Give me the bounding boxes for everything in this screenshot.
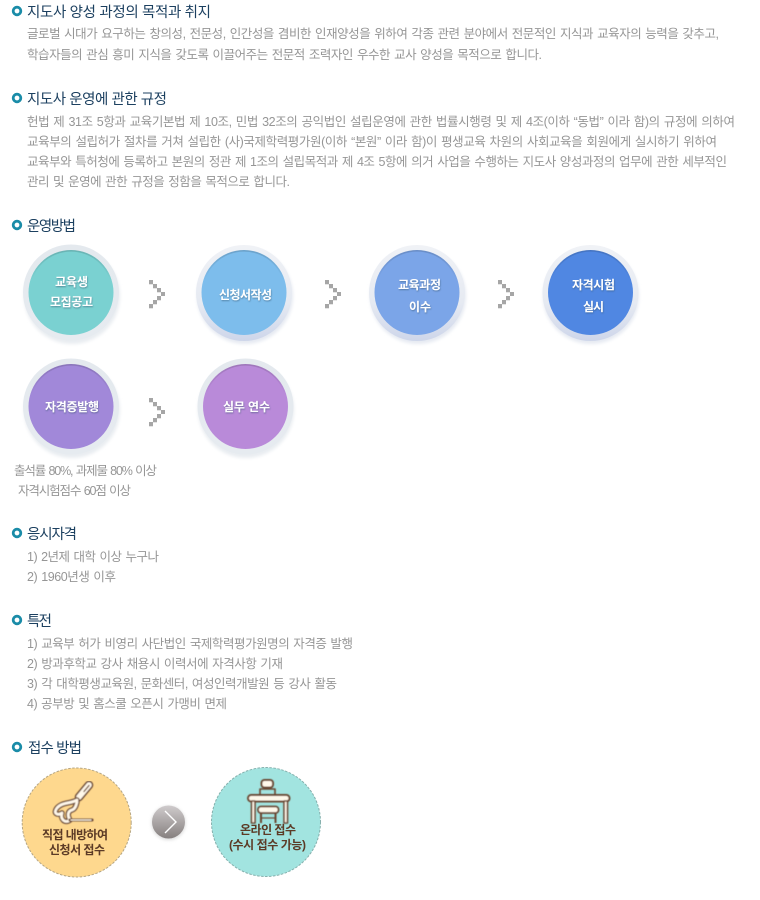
step: 신청서작성: 신청서작성 <box>219 287 272 302</box>
text block: benefits: 2) 방과후학교 강사 채용시 이력서에 자격사항 기재 <box>27 657 283 671</box>
step: 신청서작성 <box>196 245 293 344</box>
caption: completion criteria: 자격시험점수 60점 이상 <box>18 484 131 498</box>
arrow <box>325 280 341 309</box>
icon: bullet <box>13 7 21 15</box>
text block: benefits: 1) 교육부 허가 비영리 사단법인 국제학력평가원명의 자격증 발행 <box>27 636 353 651</box>
step: 자격시험 실시: 자격시험 <box>572 277 615 292</box>
label: 신청서 접수 <box>49 842 105 857</box>
step: 자격시험 실시 <box>542 245 639 344</box>
section: eligibility <box>13 526 159 584</box>
text block: eligibility <box>27 550 159 584</box>
heading: application method: 접수 방법 <box>28 740 82 757</box>
section: purpose <box>13 4 719 62</box>
heading: regulations: 지도사 운영에 관한 규정 <box>27 91 167 108</box>
label: (수시 접수 가능) <box>229 837 306 852</box>
caption: completion criteria: 출석률 80%, 과제물 80% 이상 <box>14 464 157 478</box>
step: 자격증발행: 자격증발행 <box>45 399 99 414</box>
label <box>229 823 306 852</box>
text block: eligibility: 1) 2년제 대학 이상 누구나 <box>27 550 159 564</box>
heading: purpose: 지도사 양성 과정의 목적과 취지 <box>27 4 211 21</box>
step: 실무 연수 <box>198 358 294 458</box>
step: 교육과정 이수: 교육과정 <box>398 277 441 292</box>
icon: bullet <box>13 221 21 229</box>
step: 자격증발행 <box>23 358 120 458</box>
section: regulations <box>13 91 735 189</box>
section: application method <box>13 740 320 877</box>
arrow <box>498 280 514 309</box>
heading: eligibility: 응시자격 <box>27 526 77 543</box>
text block: regulations: 교육부의 설립허가 절차를 거쳐 설립한 (사)국제학력평가원(이하 “본원” 이라 함)이 평생교육 차원의 사회교육을 회원에게 실시하기 위하여 <box>27 135 717 149</box>
label: 직접 내방하여 <box>42 828 108 842</box>
label <box>42 828 108 857</box>
heading: benefits: 특전 <box>27 613 52 630</box>
text block: regulations <box>27 114 735 189</box>
section: operating method <box>13 218 639 498</box>
icon: bullet <box>13 529 21 537</box>
text block: purpose: 학습자들의 관심 흥미 지식을 갖도록 이끌어주는 전문적 조력자인 우수한 교사 양성을 목적으로 합니다. <box>27 48 542 62</box>
step: 교육과정 이수: 이수 <box>409 300 431 314</box>
arrow <box>149 280 165 309</box>
arrow <box>149 398 165 427</box>
heading: operating method: 운영방법 <box>27 218 76 235</box>
caption: completion criteria <box>14 464 157 498</box>
icon: bullet <box>13 94 21 102</box>
text block: purpose: 글로벌 시대가 요구하는 창의성, 전문성, 인간성을 겸비한 인재양성을 위하여 각종 관련 분야에서 전문적인 지식과 교육자의 능력을 갖추고, <box>27 27 719 41</box>
step: 교육생 모집공고: 모집공고 <box>50 295 93 309</box>
text block: regulations: 관리 및 운영에 관한 규정을 정함을 목적으로 합니다. <box>27 175 290 189</box>
step: 교육과정 이수 <box>369 245 466 344</box>
step: 교육생 모집공고 <box>23 244 120 344</box>
text block: benefits: 3) 각 대학평생교육원, 문화센터, 여성인력개발원 등 강사 활동 <box>27 677 337 691</box>
text block: benefits <box>27 636 353 711</box>
icon: bullet <box>13 616 21 624</box>
step: 자격시험 실시: 실시 <box>583 300 604 314</box>
text block: benefits: 4) 공부방 및 홈스쿨 오픈시 가맹비 면제 <box>27 697 227 711</box>
icon: desk and chair <box>248 780 290 823</box>
label: 온라인 접수 <box>240 823 296 837</box>
step: 실무 연수: 실무 연수 <box>223 400 270 414</box>
option: visit in person <box>22 768 131 877</box>
arrow: round button <box>152 806 186 840</box>
text block: purpose <box>27 27 719 62</box>
text block: regulations: 교육부와 특허청에 등록하고 본원의 정관 제 1조의 설립목적과 제 4조 5항에 의거 사업을 수행하는 지도사 양성과정의 업무에 관한 세부적인 <box>27 154 727 169</box>
text block: regulations: 헌법 제 31조 5항과 교육기본법 제 10조, 민법 32조의 공익법인 설립운영에 관한 법률시행령 및 제 4조(이하 “동법” 이라 함)의 규정에 의하여 <box>27 114 735 129</box>
text block: eligibility: 2) 1960년생 이후 <box>27 570 116 584</box>
option: online <box>212 768 320 876</box>
section: benefits <box>13 613 353 711</box>
step: 교육생 모집공고: 교육생 <box>55 275 88 289</box>
icon: bullet <box>13 743 21 751</box>
icon: hand with pen <box>55 785 92 821</box>
